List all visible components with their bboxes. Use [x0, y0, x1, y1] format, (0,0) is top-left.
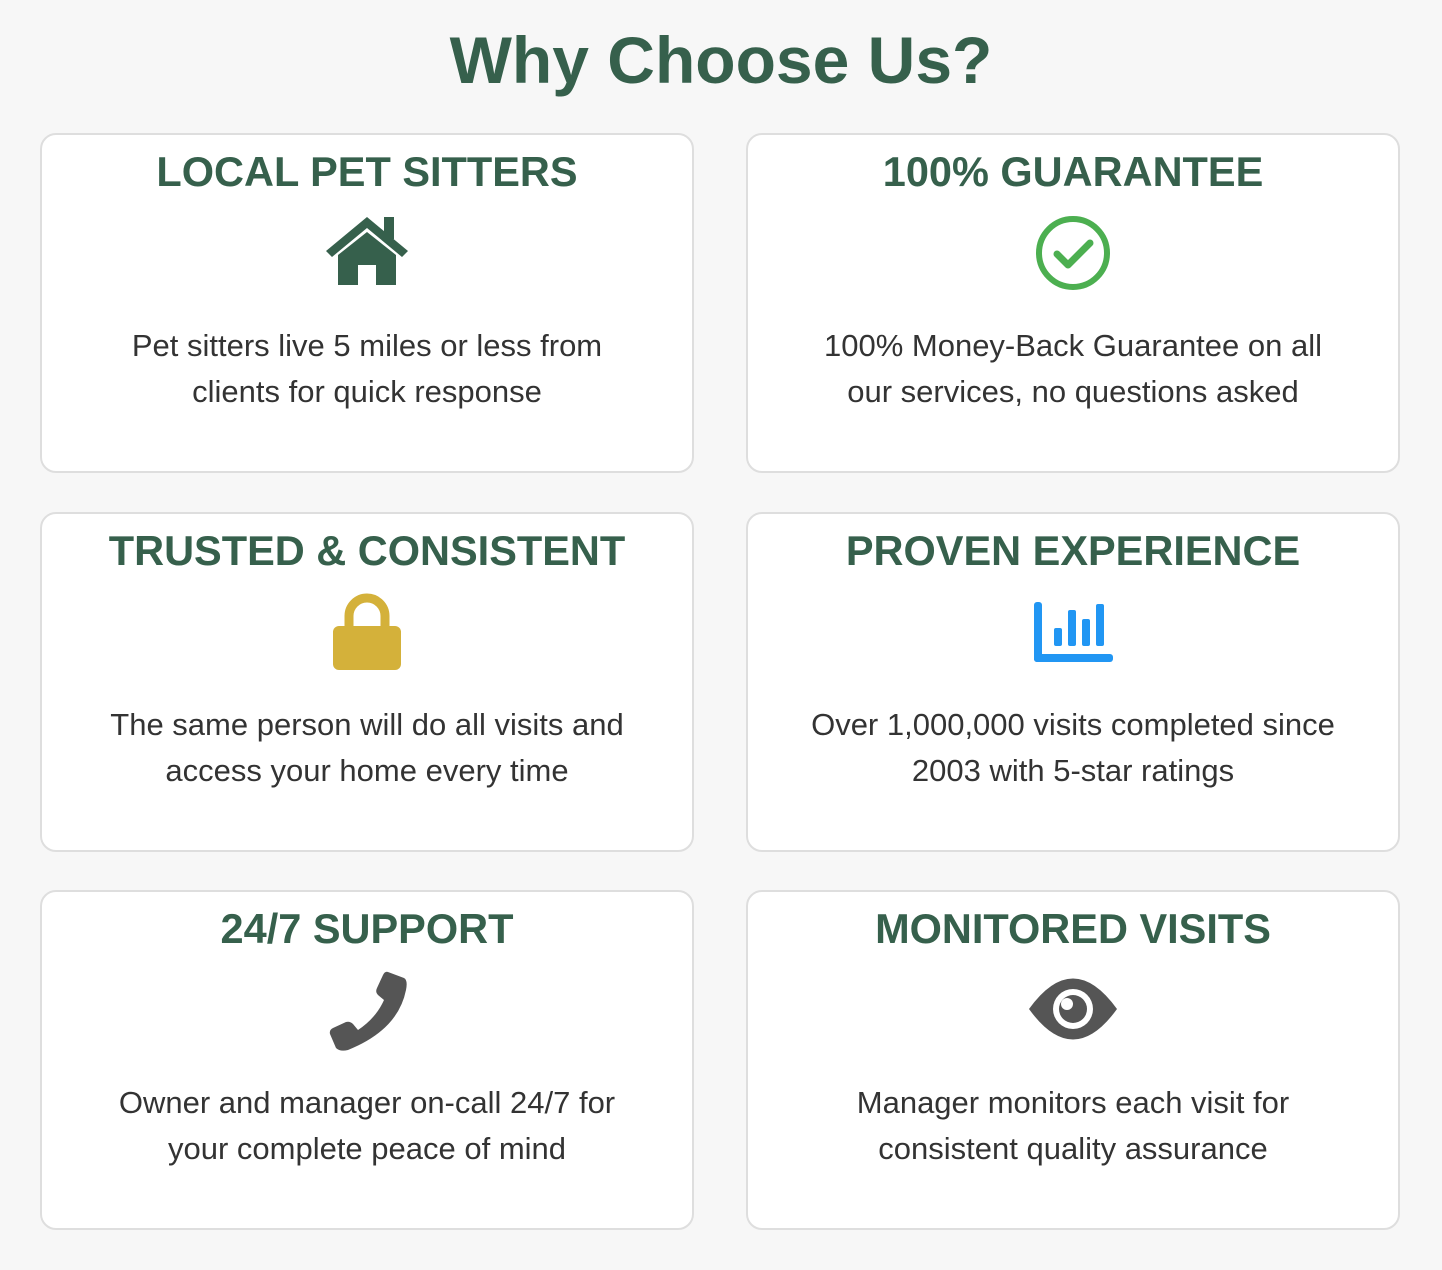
heading: MONITORED VISITS	[875, 905, 1271, 952]
heading: 24/7 SUPPORT	[221, 905, 513, 952]
heading: PROVEN EXPERIENCE	[846, 527, 1300, 574]
icon: lock	[333, 594, 401, 670]
title: Why Choose Us?	[450, 23, 992, 97]
text	[811, 707, 1335, 788]
text: Pet sitters live 5 miles or less from	[132, 328, 602, 363]
panel: local pet sitters	[40, 133, 694, 473]
text: clients for quick response	[192, 374, 542, 409]
panel: trusted	[40, 512, 694, 852]
text: Over 1,000,000 visits completed since	[811, 707, 1335, 742]
text: Manager monitors each visit for	[857, 1085, 1289, 1120]
text	[857, 1085, 1289, 1166]
text: 2003 with 5-star ratings	[912, 753, 1234, 788]
icon: phone	[330, 972, 407, 1051]
icon: eye	[1029, 978, 1117, 1040]
panel: proven experience	[746, 512, 1400, 852]
text	[119, 1085, 615, 1166]
icon: check circle	[1036, 216, 1110, 290]
text: The same person will do all visits and	[110, 707, 624, 742]
panel: 100% guarantee	[746, 133, 1400, 473]
panel: 24/7 support	[40, 890, 694, 1230]
text: 100% Money-Back Guarantee on all	[824, 328, 1322, 363]
text: Owner and manager on-call 24/7 for	[119, 1085, 615, 1120]
text: our services, no questions asked	[847, 374, 1299, 409]
heading: local pet sitters: LOCAL PET SITTERS	[156, 148, 578, 195]
heading: 100% GUARANTEE	[883, 148, 1263, 195]
text	[110, 707, 624, 788]
text: access your home every time	[165, 753, 569, 788]
icon: house	[326, 217, 408, 285]
icon: bar chart	[1034, 602, 1113, 662]
heading: TRUSTED & CONSISTENT	[109, 527, 625, 574]
text	[132, 328, 602, 409]
text: your complete peace of mind	[168, 1131, 566, 1166]
text	[824, 328, 1322, 409]
text: consistent quality assurance	[878, 1131, 1268, 1166]
panel: monitored visits	[746, 890, 1400, 1230]
